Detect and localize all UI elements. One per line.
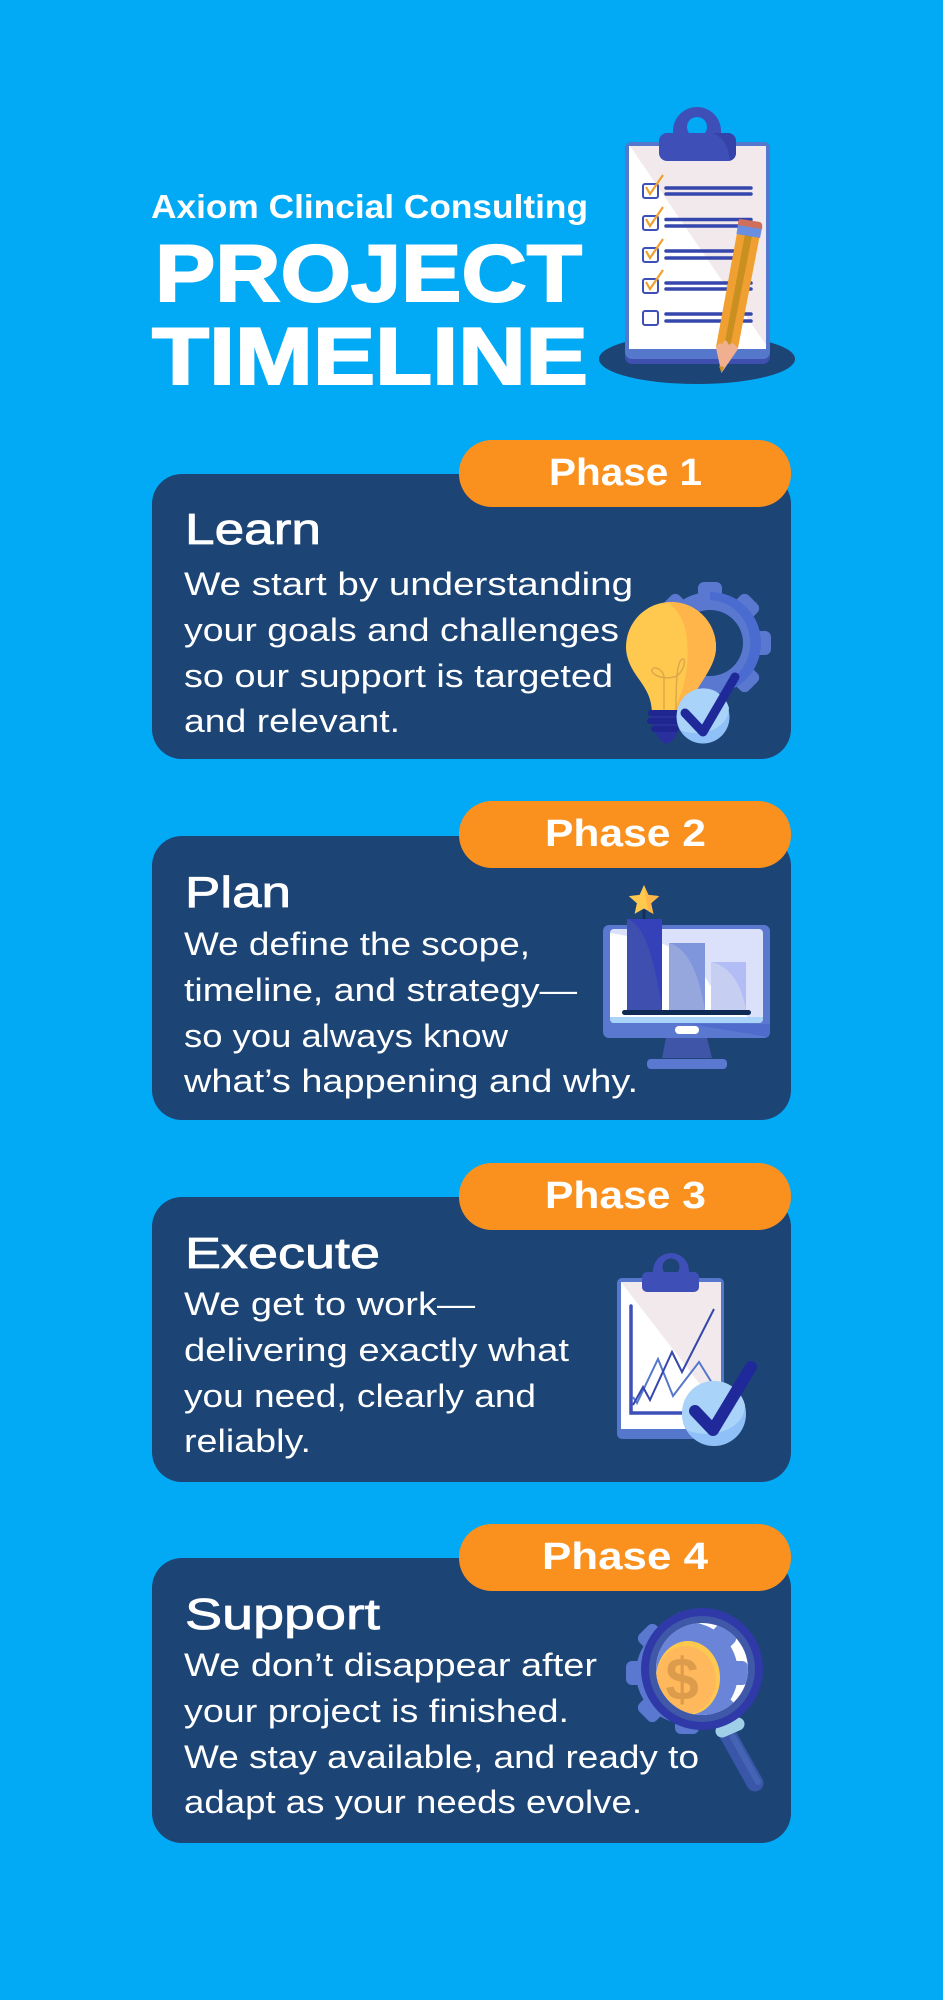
body text: execute: We get to work—	[184, 1286, 475, 1322]
title line: TIMELINE: TIMELINE	[152, 312, 588, 402]
body text: support: your project is finished.	[184, 1693, 569, 1729]
icon: light bulb, gear and check	[626, 582, 771, 744]
body text: learn: We start by understanding	[184, 566, 633, 602]
body text: plan: We define the scope,	[184, 926, 530, 962]
title block	[151, 188, 588, 402]
badge: phase 2: Phase 2	[545, 813, 706, 855]
body text: learn: so our support is targeted	[184, 658, 613, 694]
badge: phase 1	[459, 440, 791, 507]
body text: support	[184, 1647, 699, 1820]
panel: phase 4 support	[152, 1524, 791, 1843]
body text: learn: your goals and challenges	[184, 612, 619, 648]
body text: plan: timeline, and strategy—	[184, 972, 577, 1008]
title line: PROJECT: PROJECT	[155, 229, 582, 319]
panel: phase 2 plan	[152, 801, 791, 1120]
icon: monitor with bar chart and star	[603, 885, 770, 1069]
body text: execute: you need, clearly and	[184, 1378, 536, 1414]
badge: phase 4: Phase 4	[542, 1536, 708, 1578]
heading: execute: Execute	[185, 1229, 380, 1278]
heading: learn: Learn	[185, 505, 321, 554]
icon: checklist clipboard with pencil	[599, 107, 795, 384]
dollar sign: $	[665, 1646, 699, 1713]
heading: support: Support	[185, 1590, 380, 1639]
panel: phase 3 execute	[152, 1163, 791, 1482]
body text: plan	[183, 926, 638, 1099]
body text: execute	[184, 1286, 569, 1459]
body text: learn: and relevant.	[184, 703, 400, 739]
body text: learn	[184, 566, 633, 739]
icon: magnifier with gear and dollar coin	[626, 1608, 763, 1783]
badge: phase 3	[459, 1163, 791, 1230]
body text: support: We don’t disappear after	[184, 1647, 597, 1683]
badge: phase 1: Phase 1	[549, 452, 702, 494]
body text: execute: delivering exactly what	[184, 1332, 569, 1368]
badge: phase 3: Phase 3	[545, 1175, 706, 1217]
body text: support: We stay available, and ready to	[184, 1739, 699, 1775]
company name: Axiom Clincial Consulting	[151, 188, 588, 225]
icon: clipboard with line chart and check	[617, 1253, 751, 1446]
body text: execute: reliably.	[184, 1423, 311, 1459]
badge: phase 4	[459, 1524, 791, 1591]
badge: phase 2	[459, 801, 791, 868]
panel: phase 1 learn	[152, 440, 791, 759]
body text: plan: so you always know	[184, 1018, 509, 1054]
heading: plan: Plan	[185, 868, 291, 917]
body text: plan: what’s happening and why.	[183, 1063, 638, 1099]
body text: support: adapt as your needs evolve.	[184, 1784, 642, 1820]
